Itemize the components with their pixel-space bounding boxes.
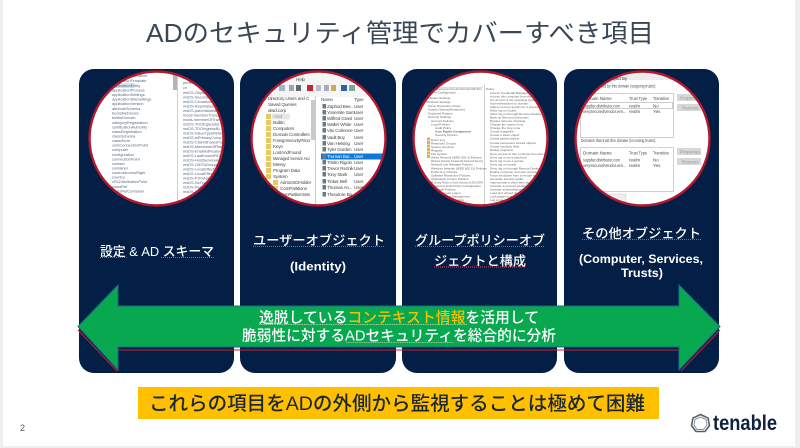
callout: yellow conclusion bar bbox=[138, 387, 659, 419]
screenshot: Active Directory users: Vault Boy bbox=[327, 135, 346, 140]
screenshot: AD schema list: msDS-CloudAnchor bbox=[183, 99, 218, 104]
screenshot: AD schema list: applicationProcess bbox=[112, 88, 145, 92]
screenshot: Active Directory users: User bbox=[354, 110, 364, 115]
screenshot: AD schema list: container bbox=[112, 166, 129, 170]
screenshot: Active Directory users: Keys bbox=[273, 144, 283, 149]
screenshot: group policy editor: Create a pagefile bbox=[490, 130, 514, 134]
screenshot: group policy editor: er Configuration bbox=[434, 90, 456, 94]
screenshot: group policy editor: User Rights Assignment bbox=[435, 130, 471, 134]
screenshot: Active Directory users: Zaphod Bee... bbox=[327, 104, 354, 109]
screenshot: group policy editor: Bypass traverse checking bbox=[490, 119, 526, 123]
screenshot: AD schema list: applicationSiteSettings bbox=[112, 96, 151, 102]
screenshot: Active Directory users: ComPartitionSets bbox=[280, 192, 311, 197]
screenshot: domain trusts dialog: Domains trusted by this domain (outgoing trusts): bbox=[581, 84, 656, 88]
screenshot: domain trusts dialog: verySecuredVendor.ven... bbox=[583, 163, 626, 168]
screenshot: group policy editor: Windows Defender Firewall with Advanced Security bbox=[431, 159, 483, 163]
screenshot: AD schema list: msDS-IsPrimaryComp bbox=[183, 135, 222, 140]
screenshot: group policy editor: Security Options bbox=[435, 133, 458, 137]
screenshot: domain trusts dialog: realm bbox=[629, 158, 641, 162]
screenshot: group policy editor: Public Key Policies bbox=[431, 170, 458, 174]
screenshot: AD schema list: msDS-OIDToGroupLink bbox=[183, 162, 224, 167]
label: other objects: (Computer, Services, bbox=[579, 252, 703, 266]
screenshot: Active Directory users: Domain Controllers bbox=[273, 132, 310, 137]
screenshot: domain trusts dialog: Transitive bbox=[653, 150, 669, 156]
screenshot: group policy editor: IP Security Policies on Active Directory (ALSID.CORP) bbox=[431, 180, 483, 184]
screenshot: group policy editor: Access Credential Manager as a trusted bbox=[490, 91, 545, 95]
screenshot: Active Directory users: Builtin bbox=[273, 120, 285, 125]
screenshot: AD schema list: controlAccessRight bbox=[112, 170, 146, 175]
screenshot: AD schema list: msDS-TDOIngressBL bbox=[183, 126, 221, 131]
screenshot: Active Directory users: Walter White bbox=[327, 122, 352, 127]
screenshot: Active Directory users: ComPartitions bbox=[280, 186, 308, 191]
screenshot: Active Directory users: Name bbox=[321, 97, 333, 102]
screenshot: group policy editor: Create global objects bbox=[490, 136, 520, 140]
screenshot: AD schema list: applicationContainer bbox=[112, 73, 148, 78]
screenshot: AD schema list: msDS-Preferred bbox=[183, 75, 211, 80]
title: ADのセキュリティ管理でカバーすべき項目 bbox=[146, 20, 654, 48]
screenshot: domain trusts dialog: Trust Type bbox=[629, 150, 647, 156]
screenshot: group policy editor: System Services bbox=[431, 145, 454, 149]
panel: other objects bbox=[564, 69, 719, 373]
screenshot: group policy editor: Impersonate a client after authentication bbox=[490, 180, 545, 184]
screenshot: domain trusts dialog: Yes bbox=[653, 109, 661, 114]
screenshot: group policy editor: Enable computer and user accounts to be trusted bbox=[490, 170, 558, 174]
screenshot: group policy editor: Deny log on through Remote Desktop Services bbox=[490, 166, 555, 170]
screenshot: group policy editor: Create permanent shared objects bbox=[490, 141, 536, 145]
screenshot: AD schema list: bootableDevice bbox=[112, 110, 139, 116]
screenshot: domain trusts dialog: No bbox=[653, 158, 659, 162]
screenshot: AD schema list: msDS-LocalEffective2 bbox=[183, 171, 221, 176]
screenshot: Active Directory users: User bbox=[354, 135, 364, 140]
screenshot: domain trusts dialog: Remove bbox=[682, 160, 699, 164]
screenshot: AD schema list: certificationAuthority bbox=[112, 124, 147, 130]
screenshot: Active Directory users: Computers bbox=[273, 126, 295, 131]
screenshot: AD schema list: applicationTemplate bbox=[112, 78, 146, 83]
screenshot: AD schema list: contact bbox=[112, 161, 125, 166]
label: group policy objects bbox=[415, 233, 545, 268]
screenshot: group policy editor: Advanced Audit Policy Configuration bbox=[431, 184, 481, 188]
label: other objects: Trusts) bbox=[621, 266, 663, 280]
screenshot: group policy editor: Policy bbox=[486, 87, 495, 91]
logo: tenable bbox=[692, 412, 777, 435]
screenshot: AD schema list: cn bbox=[183, 85, 187, 90]
label: user objects bbox=[253, 233, 385, 274]
label: other objects bbox=[579, 226, 703, 280]
screenshot: Active Directory users: User bbox=[354, 116, 364, 121]
screenshot: Active Directory users: User bbox=[354, 166, 364, 171]
screenshot: group policy editor: Name Resolution Policy bbox=[428, 104, 461, 108]
screenshot: domain trusts dialog: Properties bbox=[680, 96, 701, 100]
screenshot: Active Directory users: Thomas An... bbox=[327, 185, 352, 190]
screenshot: domain trusts dialog: Domain Name bbox=[583, 96, 612, 101]
screenshot: Active Directory users: Messy bbox=[273, 162, 286, 167]
screenshot: Active Directory users: User bbox=[354, 141, 364, 146]
screenshot: group policy editor: Default Domain Policy [DC-2016.ALSID.CORP] Policy bbox=[436, 87, 482, 91]
screenshot: group policy editor: File System bbox=[431, 152, 448, 156]
screenshot: AD schema list: msDS-LastKnownRDN bbox=[183, 153, 223, 158]
screenshot: Active Directory users: Wilfred Grant bbox=[327, 116, 353, 121]
screenshot: group policy editor: Change the system time bbox=[490, 122, 524, 126]
screenshot: AD schema list: attributeSchema bbox=[112, 106, 141, 111]
screenshot: AD schema list: msDS-EnabledFeature bbox=[183, 148, 223, 154]
screenshot: group policy editor: Increase scheduling priority bbox=[490, 188, 528, 192]
screenshot: group policy editor: Audit Policies bbox=[437, 188, 456, 192]
screenshot: Active Directory users: Tinker Bell bbox=[327, 179, 347, 184]
screenshot: group policy editor: Detailed Tracking bbox=[440, 198, 464, 202]
screenshot: Active Directory users: User bbox=[354, 172, 364, 177]
screenshot: Active Directory users: User bbox=[354, 185, 364, 190]
screenshot: Active Directory users: Theodore Ba... bbox=[327, 192, 355, 197]
screenshot: domain trusts dialog: Domain Name bbox=[583, 150, 612, 156]
screenshot: AD schema list: msDS-SecondaryKrb bbox=[183, 94, 220, 100]
screenshot: domain trusts dialog: No bbox=[653, 104, 659, 108]
screenshot: Active Directory users: Trevor Reznik bbox=[327, 166, 354, 171]
panel: group policy objects bbox=[402, 69, 558, 373]
label: settings and AD schema: 設定 & AD スキーマ bbox=[100, 244, 214, 259]
screenshot: Active Directory users: Saved Queries bbox=[268, 102, 297, 107]
screenshot: group policy editor: Scripts (Startup/Shutdown) bbox=[428, 108, 465, 112]
logo: tenable: tenable bbox=[713, 412, 777, 435]
screenshot: group policy editor: Allow log on through Remote Desktop Services bbox=[490, 112, 555, 116]
screenshot: Active Directory users: User bbox=[354, 128, 364, 133]
screenshot: Active Directory users: User bbox=[354, 104, 364, 109]
screenshot: group policy editor: Lock pages in memory bbox=[490, 194, 522, 198]
screenshot: group policy editor: Change the time zone bbox=[490, 126, 521, 130]
screenshot: group policy editor: Deny access to this computer from the network bbox=[490, 152, 555, 156]
screenshot: AD schema list: msDS-LocalEffective bbox=[183, 166, 219, 172]
screenshot: AD schema list: builtinDomain bbox=[112, 115, 136, 120]
text: arrow message: 逸脱しているコンテキスト情報を活用して bbox=[259, 310, 539, 326]
screenshot: group policy editor: Network List Manager Policies bbox=[431, 162, 473, 166]
screenshot: group policy editor: Allow log on locally bbox=[490, 108, 517, 112]
arrow: double-headed green arrow with message bbox=[78, 285, 720, 371]
screenshot: group policy editor: Account Management bbox=[440, 194, 470, 198]
screenshot: domain trusts dialog: verySecuredVendor.ven... bbox=[583, 109, 626, 114]
screenshot: group policy editor: Security Settings bbox=[428, 115, 452, 119]
screenshot: group policy editor: Log on as a batch job bbox=[490, 198, 520, 202]
screenshot: Active Directory users: Type bbox=[354, 97, 364, 102]
screenshot: group policy editor: Adjust memory quotas for a process bbox=[490, 105, 540, 109]
screenshot: Active Directory users bbox=[250, 72, 390, 208]
screenshot: Active Directory users: alsid.corp bbox=[268, 108, 287, 113]
screenshot: AD schema list: msDS-TDOEgressBL bbox=[183, 122, 221, 126]
screenshot: AD schema list: classStore bbox=[112, 138, 130, 143]
screenshot: group policy editor: Force shutdown from a remote system bbox=[490, 174, 543, 178]
screenshot: group policy editor: Software Settings bbox=[426, 96, 451, 100]
screenshot: domain trusts dialog: Trust Type bbox=[629, 96, 647, 101]
screenshot: Active Directory users: Van Helsing bbox=[327, 141, 350, 146]
screenshot: group policy editor bbox=[414, 72, 558, 207]
screenshot: AD schema list: msDS-parentdistname bbox=[183, 108, 222, 113]
screenshot: AD schema list: comConnectionPoint bbox=[112, 142, 149, 148]
screenshot: AD schema list: crossRefContainer bbox=[112, 188, 145, 194]
screenshot: domain trusts dialog: Transitive bbox=[653, 96, 669, 101]
screenshot: Active Directory users: Program Data bbox=[273, 168, 300, 173]
screenshot: group policy editor: Wired Network (IEEE 802.3) Policies bbox=[431, 156, 482, 160]
screenshot: AD schema list: msDS-HostServiceAcc bbox=[183, 158, 222, 162]
panel: user objects bbox=[240, 69, 396, 373]
text: arrow message: 脆弱性に対するADセキュリティを総合的に分析 bbox=[242, 326, 556, 344]
screenshot: group policy editor: Account Logon bbox=[440, 191, 461, 195]
screenshot: Active Directory users: LostAndFound bbox=[273, 150, 302, 155]
screenshot: group policy editor: Create a token object bbox=[490, 133, 520, 137]
screenshot: Active Directory users: ive Directory Users and C bbox=[261, 96, 310, 101]
screenshot: group policy editor: Deny log on as a service bbox=[490, 159, 524, 163]
screenshot: AD schema list: applicationVersion bbox=[112, 101, 144, 106]
screenshot: AD schema list: msDS-MembersOfRes bbox=[183, 144, 222, 149]
screenshot: domain trusts dialog: realm bbox=[629, 104, 641, 108]
screenshot: group policy editor: Generate security audits bbox=[490, 177, 524, 181]
screenshot: AD schema list: connectionPoint bbox=[112, 156, 141, 162]
screenshot: domain trusts dialog: Properties bbox=[680, 150, 701, 154]
screenshot: Active Directory users: Tony Stark bbox=[327, 172, 348, 177]
screenshot: AD schema list: applicationSettings bbox=[112, 92, 145, 97]
label: user objects: (Identity) bbox=[290, 260, 346, 274]
screenshot: group policy editor: Debug programs bbox=[490, 148, 513, 152]
screenshot: group policy editor: Access this computer from the network bbox=[490, 94, 544, 98]
screenshot: AD schema list: msDS-RepliValueMeta bbox=[183, 104, 223, 108]
label: group policy objects: グループポリシーオブ bbox=[415, 233, 545, 248]
callout: yellow conclusion bar: これらの項目をADの外側から監視することは極めて困難 bbox=[149, 393, 645, 415]
screenshot: AD schema list: applicationEntity bbox=[112, 83, 140, 88]
screenshot: AD schema list: classRegistration bbox=[112, 129, 142, 134]
screenshot: Active Directory users: System bbox=[273, 174, 288, 179]
screenshot: group policy editor: Deny log on locally bbox=[490, 162, 516, 166]
screenshot: AD schema list: msDS-ClaimSharesPo bbox=[183, 140, 222, 144]
screenshot: group policy editor: Account Policies bbox=[431, 119, 454, 123]
screenshot: AD schema list: msDS-Approx bbox=[183, 189, 207, 194]
screenshot: Active Directory users: Tristro Rigolo bbox=[327, 160, 352, 165]
screenshot: Active Directory users: Managed Service Acc bbox=[273, 156, 311, 161]
screenshot: AD schema list: computer bbox=[112, 147, 129, 152]
screenshot: Active Directory users: User bbox=[354, 154, 364, 159]
screenshot: Active Directory users: Truman Bur... bbox=[327, 154, 353, 159]
screenshot: Active Directory users: User bbox=[354, 160, 364, 165]
screenshot: group policy editor: Local Policies bbox=[431, 122, 450, 126]
screenshot: group policy editor: Back up files and directories bbox=[490, 116, 529, 120]
screenshot: group policy editor: Restricted Groups bbox=[431, 142, 456, 146]
screenshot: AD schema list: msDS-NcType bbox=[183, 180, 208, 185]
screenshot: AD schema list: classSchema bbox=[112, 134, 136, 138]
screenshot: domain trusts dialog: Domains that trust this domain (incoming trusts): bbox=[581, 138, 656, 143]
screenshot: domain trusts dialog: supplier.distributor.com bbox=[583, 158, 620, 162]
screenshot: Active Directory users: User bbox=[354, 122, 364, 127]
panel: settings and AD schema bbox=[79, 69, 234, 373]
screenshot: group policy editor: Audit Policy bbox=[435, 126, 452, 130]
screenshot: domain trusts dialog: supplier.distributor.com bbox=[583, 104, 620, 108]
screenshot: group policy editor: Load and unload device drivers bbox=[490, 191, 533, 195]
screenshot: group policy editor: Application Control Policies bbox=[431, 177, 469, 181]
screenshot: domain trusts dialog bbox=[575, 70, 711, 206]
icon: tenable hexagon bbox=[692, 414, 710, 432]
screenshot: AD schema list: msDS-ObjectGuid bbox=[183, 90, 214, 95]
screenshot: group policy editor: Act as part of the operating system bbox=[490, 98, 538, 102]
label: other objects: その他オブジェクト bbox=[582, 226, 701, 241]
screenshot: Active Directory users: Yosemite Sam bbox=[327, 110, 355, 115]
screenshot: Active Directory users: User bbox=[354, 179, 364, 184]
screenshot: group policy editor: Software Restriction Policies bbox=[431, 174, 471, 178]
label: user objects: ユーザーオブジェクト bbox=[253, 233, 385, 248]
screenshot: AD schema list: crossRef bbox=[112, 184, 128, 189]
screenshot: AD schema list: mods-memberOfTransitive bbox=[183, 117, 229, 122]
screenshot: AD schema list: msDS-ValueTypeRefer bbox=[183, 130, 223, 136]
screenshot: group policy editor: Increase a process working set bbox=[490, 184, 533, 188]
screenshot: group policy editor: Wireless Network (IEEE 802.11) Policies bbox=[431, 166, 487, 170]
screenshot: group policy editor: Create symbolic links bbox=[490, 144, 520, 148]
screenshot: AD schema list: configuration bbox=[112, 152, 134, 157]
screenshot: domain trusts dialog: realm bbox=[629, 109, 641, 114]
label: group policy objects: ジェクトと構成 bbox=[434, 254, 526, 268]
screenshot: AD schema list: msDS-ReplAuthName bbox=[183, 184, 221, 190]
screenshot: Active Directory users: User bbox=[354, 147, 364, 152]
screenshot: AD schema list bbox=[90, 70, 229, 210]
screenshot: domain trusts dialog: realm bbox=[629, 163, 641, 168]
screenshot: AD schema list: msDS-PSOApplied bbox=[183, 176, 216, 180]
screenshot: domain trusts dialog: Remove bbox=[682, 106, 699, 110]
screenshot: Active Directory users: ForeignSecurityPrinci bbox=[273, 138, 310, 143]
screenshot: domain trusts dialog: Yes bbox=[653, 163, 661, 168]
screenshot: group policy editor: Event Log bbox=[431, 138, 445, 142]
screenshot: Active Directory users: Vito Corleone bbox=[327, 128, 353, 133]
screenshot: AD schema list: preferredOU bbox=[183, 80, 205, 85]
screenshot: Active Directory users: AdminSDHolder bbox=[280, 180, 312, 185]
screenshot: group policy editor: Windows Settings bbox=[426, 100, 451, 104]
screenshot: Active Directory users: Tyler Durden bbox=[327, 147, 352, 152]
screenshot: Active Directory users: Help bbox=[296, 77, 305, 82]
screenshot: AD schema list: cRLDistributionPoint bbox=[112, 179, 148, 184]
screenshot: group policy editor: Deployed Printers bbox=[428, 112, 453, 116]
screenshot: group policy editor: Add workstations to domain bbox=[490, 102, 528, 106]
screenshot: Active Directory users: Alsid bbox=[273, 114, 283, 119]
text: arrow message bbox=[242, 310, 556, 344]
page number: 2 bbox=[20, 423, 25, 433]
screenshot: AD schema list: mods-memberTransitive bbox=[183, 112, 225, 118]
screenshot: AD schema list: country bbox=[112, 174, 125, 180]
screenshot: group policy editor: Deny log on as a batch job bbox=[490, 156, 527, 160]
screenshot: AD schema list: categoryRegistration bbox=[112, 120, 148, 125]
screenshot: domain trusts dialog: Managed By bbox=[602, 76, 628, 81]
screenshot: group policy editor: Registry bbox=[431, 148, 443, 152]
